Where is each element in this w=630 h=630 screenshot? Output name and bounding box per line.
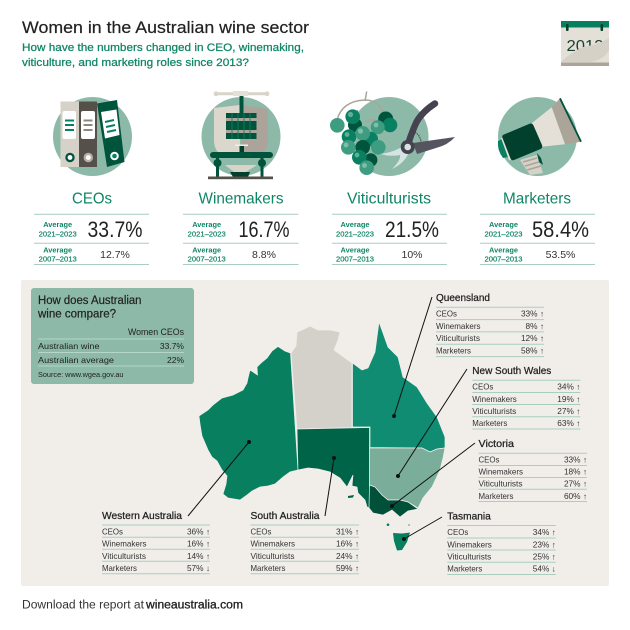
table: Victoria: Viticulturists <box>478 479 522 489</box>
panel: Marketers stat: 2021–2023 <box>484 230 522 239</box>
table: South Australia: 59% ↑ <box>336 563 359 573</box>
panel: Marketers stat: Marketers <box>503 190 571 208</box>
table: Victoria: 18% ↑ <box>564 467 587 477</box>
callout: how does Australian wine compare <box>31 288 194 384</box>
panel: Winemakers stat: Average <box>192 220 221 229</box>
table: South Australia: 31% ↑ <box>336 526 359 536</box>
map of Australia <box>199 322 445 550</box>
panel: CEOs stat: Average <box>43 246 72 255</box>
subtitle <box>22 42 304 69</box>
table: South Australia: Viticulturists <box>250 551 294 561</box>
panel: Marketers stat: 58.4% <box>532 217 589 242</box>
panel: Viticulturists stat: Viticulturists <box>347 190 431 208</box>
leader line: Tasmania <box>402 517 442 541</box>
table: Western Australia: Marketers <box>102 563 137 573</box>
state: New South Wales <box>370 448 445 508</box>
table: New South Wales: 34% ↑ <box>557 382 580 392</box>
state: Western Australia <box>199 346 298 500</box>
table: Tasmania: 23% ↑ <box>533 539 556 549</box>
panel: map background <box>21 280 609 586</box>
table: Tasmania: 25% ↑ <box>533 552 556 562</box>
callout: how does Australian wine compare: Source: www.wgea.gov.au <box>38 372 124 379</box>
table: Victoria: Marketers <box>478 491 514 501</box>
table: South Australia: Marketers <box>250 563 286 573</box>
panel: Viticulturists stat: 10% <box>401 249 423 261</box>
footer: download link: Download the report at <box>22 600 145 612</box>
Kangaroo Island and Bass Strait islands <box>348 495 410 526</box>
table: Victoria <box>478 438 587 502</box>
panel: Viticulturists stat <box>332 190 447 264</box>
table: Western Australia: Viticulturists <box>102 551 146 561</box>
table: Tasmania: Marketers <box>447 564 482 574</box>
table: Queensland: Queensland <box>436 292 490 304</box>
callout: how does Australian wine compare: Women CEOs <box>128 327 185 337</box>
table: Tasmania: 34% ↑ <box>533 527 556 537</box>
panel: CEOs stat <box>34 190 149 264</box>
icon: grapes and secateurs <box>330 92 455 176</box>
footer: download link: wineaustralia.com <box>145 600 243 612</box>
panel: CEOs stat: 2007–2013 <box>39 255 77 264</box>
table: South Australia: South Australia <box>250 510 320 522</box>
subtitle: viticulture, and marketing roles since 2013? <box>22 57 249 69</box>
table: New South Wales: CEOs <box>472 382 493 392</box>
table: Western Australia: 57% ↓ <box>187 563 210 573</box>
callout: how does Australian wine compare: How does Australian <box>38 295 142 307</box>
panel: Marketers stat: Average <box>489 246 518 255</box>
panel: Viticulturists stat: Average <box>341 220 369 229</box>
panel: Winemakers stat: 16.7% <box>238 217 290 242</box>
panel: Winemakers stat <box>183 190 298 264</box>
panel: Marketers stat: 2007–2013 <box>484 255 522 264</box>
table: South Australia <box>250 510 359 574</box>
table: Western Australia: 36% ↑ <box>187 526 210 536</box>
panel: Winemakers stat: Winemakers <box>198 190 284 208</box>
panel: Winemakers stat: 8.8% <box>252 249 276 261</box>
table: Queensland: Winemakers <box>436 321 480 331</box>
table: New South Wales: Viticulturists <box>472 406 516 416</box>
leader line: New South Wales <box>396 369 467 478</box>
table: Tasmania: Viticulturists <box>447 552 491 562</box>
title: Women in the Australian wine sector <box>22 19 310 37</box>
leader line: Western Australia <box>188 440 251 516</box>
table: New South Wales: 63% ↑ <box>557 418 580 428</box>
footer: download link <box>22 600 243 612</box>
table: Tasmania <box>447 510 556 574</box>
table: Queensland: Marketers <box>436 345 471 355</box>
icon: binders <box>53 97 132 176</box>
panel: Viticulturists stat: 2021–2023 <box>336 230 374 239</box>
callout: how does Australian wine compare: Australian wine <box>38 341 100 351</box>
table: New South Wales: Marketers <box>472 418 507 428</box>
table: Tasmania: Tasmania <box>447 510 491 522</box>
panel: Viticulturists stat: Average <box>341 246 369 255</box>
leader line: South Australia <box>325 456 336 516</box>
icon: wine press <box>202 91 280 179</box>
panel: CEOs stat: Average <box>43 220 72 229</box>
table: Victoria: Victoria <box>478 438 514 450</box>
leader line: Victoria <box>390 443 475 508</box>
panel: Winemakers stat: Average <box>192 246 221 255</box>
table: Queensland: CEOs <box>436 309 457 319</box>
table: Western Australia: CEOs <box>102 526 123 536</box>
table: Queensland <box>436 292 544 357</box>
state: Northern Territory <box>291 326 352 429</box>
table: Western Australia: Winemakers <box>102 539 146 549</box>
state: Victoria <box>369 485 418 517</box>
table: Queensland: 12% ↑ <box>521 333 544 343</box>
table: Queensland: Viticulturists <box>436 333 480 343</box>
panel: CEOs stat: CEOs <box>72 190 112 208</box>
table: Western Australia <box>102 510 210 574</box>
table: South Australia: 24% ↑ <box>336 551 359 561</box>
panel: Marketers stat: 53.5% <box>546 249 575 261</box>
table: New South Wales: Winemakers <box>472 394 517 404</box>
table: Victoria: 33% ↑ <box>564 455 587 465</box>
table: Queensland: 8% ↑ <box>526 321 544 331</box>
panel: CEOs stat: 33.7% <box>88 217 142 242</box>
table: New South Wales: 27% ↑ <box>557 406 580 416</box>
state: Queensland <box>352 322 445 452</box>
table: Victoria: Winemakers <box>478 467 523 477</box>
table: New South Wales: 19% ↑ <box>557 394 580 404</box>
table: South Australia: CEOs <box>250 526 272 536</box>
table: Queensland: 58% ↑ <box>521 345 544 355</box>
table: New South Wales: New South Wales <box>472 365 551 377</box>
icon: calendar <box>561 21 609 66</box>
table: Tasmania: 54% ↓ <box>533 564 556 574</box>
callout: how does Australian wine compare: wine compare? <box>37 308 116 320</box>
panel: Winemakers stat: 2021–2023 <box>188 230 226 239</box>
icon: megaphone <box>498 97 581 176</box>
panel: Marketers stat <box>480 190 595 264</box>
table: South Australia: 16% ↑ <box>336 539 359 549</box>
table: Victoria: 60% ↑ <box>564 491 587 501</box>
state: Tasmania <box>393 532 410 550</box>
table: New South Wales <box>472 365 580 429</box>
panel: Viticulturists stat: 2007–2013 <box>336 255 374 264</box>
panel: Viticulturists stat: 21.5% <box>385 217 439 242</box>
panel: CEOs stat: 2021–2023 <box>39 230 77 239</box>
panel: Marketers stat: Average <box>489 220 518 229</box>
state: South Australia <box>297 428 370 508</box>
table: Western Australia: 14% ↑ <box>187 551 210 561</box>
callout: how does Australian wine compare: 22% <box>167 355 184 365</box>
table: Western Australia: Western Australia <box>102 510 182 522</box>
table: Western Australia: 16% ↑ <box>187 539 210 549</box>
table: Queensland: 33% ↑ <box>521 309 544 319</box>
callout: how does Australian wine compare: Australian average <box>38 355 114 365</box>
panel: Winemakers stat: 2007–2013 <box>188 255 226 264</box>
table: Tasmania: CEOs <box>447 527 468 537</box>
callout: how does Australian wine compare: 33.7% <box>160 341 184 351</box>
table: Victoria: CEOs <box>478 455 500 465</box>
table: Tasmania: Winemakers <box>447 539 492 549</box>
icon: calendar: 2013 <box>566 38 604 55</box>
leader line: Queensland <box>392 297 432 418</box>
table: Victoria: 27% ↑ <box>564 479 587 489</box>
panel: CEOs stat: 12.7% <box>100 249 130 261</box>
table: South Australia: Winemakers <box>250 539 295 549</box>
subtitle: How have the numbers changed in CEO, winemaking, <box>22 42 304 54</box>
